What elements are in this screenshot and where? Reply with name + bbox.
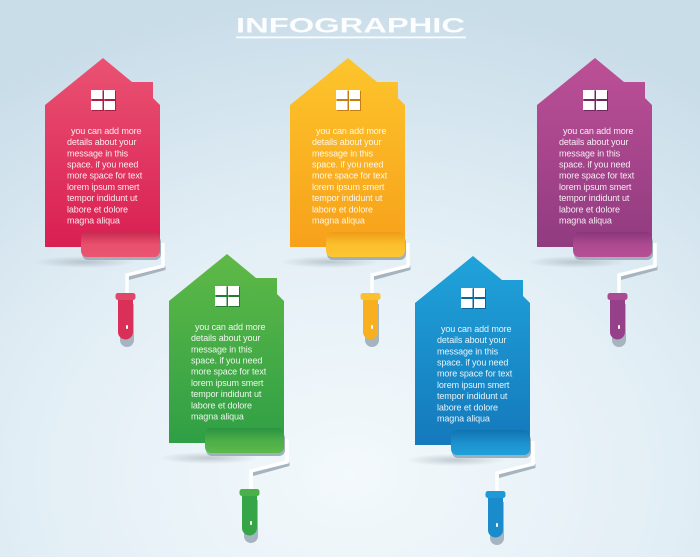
text: purple message: message in this <box>559 148 621 158</box>
text: green message: lorem ipsum smert <box>191 378 264 388</box>
text: yellow message: labore et dolore <box>312 204 373 214</box>
text: blue message: labore et dolore <box>437 402 498 412</box>
text: yellow message: you can add more <box>316 126 387 136</box>
text: green message: details about your <box>191 333 260 343</box>
roller: green <box>205 428 285 456</box>
text: purple message: space. if you need <box>559 160 630 170</box>
text: blue message: magna aliqua <box>437 414 490 424</box>
roller: purple <box>573 232 653 260</box>
text: yellow message: more space for text <box>312 171 388 181</box>
text: purple message: more space for text <box>559 171 635 181</box>
icon: yellow window <box>336 90 361 111</box>
text: green message: space. if you need <box>191 356 262 366</box>
text: blue message: message in this <box>437 346 499 356</box>
roller handle: yellow <box>360 243 410 347</box>
text: blue message: tempor indidunt ut <box>437 391 508 401</box>
roller handle: blue <box>486 441 536 545</box>
icon: red window <box>91 90 116 111</box>
text: red message: space. if you need <box>67 160 138 170</box>
text: red message: tempor indidunt ut <box>67 193 138 203</box>
text: yellow message: lorem ipsum smert <box>312 182 385 192</box>
text: yellow message: magna aliqua <box>312 216 365 226</box>
text: blue message: you can add more <box>441 324 512 334</box>
text: green message: you can add more <box>195 322 266 332</box>
text: green message: labore et dolore <box>191 400 252 410</box>
text: purple message: you can add more <box>563 126 634 136</box>
icon: purple window <box>583 90 608 111</box>
text: purple message: details about your <box>559 137 628 147</box>
house: yellow <box>290 58 405 247</box>
text: blue message: lorem ipsum smert <box>437 380 510 390</box>
roller handle: green <box>240 439 290 543</box>
panel: blue house roller <box>405 256 536 545</box>
roller: blue <box>451 430 531 458</box>
text: green message: tempor indidunt ut <box>191 389 262 399</box>
roller handle: red <box>116 243 166 347</box>
text: green message: message in this <box>191 344 253 354</box>
roller handle: purple <box>608 243 658 347</box>
roller: yellow <box>326 232 406 260</box>
text: purple message: magna aliqua <box>559 216 612 226</box>
house: red <box>45 58 160 247</box>
text: purple message: tempor indidunt ut <box>559 193 630 203</box>
text: red message: labore et dolore <box>67 204 128 214</box>
title: INFOGRAPHIC <box>236 14 465 38</box>
panel: yellow house roller <box>280 58 410 347</box>
house: green <box>169 254 284 443</box>
text: yellow message: tempor indidunt ut <box>312 193 383 203</box>
text: yellow message: details about your <box>312 137 381 147</box>
text: red message: details about your <box>67 137 136 147</box>
text: red message: magna aliqua <box>67 216 120 226</box>
text: green message: magna aliqua <box>191 412 244 422</box>
house: blue <box>415 256 530 445</box>
text: red message: you can add more <box>71 126 142 136</box>
text: red message: message in this <box>67 148 129 158</box>
text: red message: lorem ipsum smert <box>67 182 140 192</box>
text: yellow message: message in this <box>312 148 374 158</box>
panel: green house roller <box>159 254 290 543</box>
icon: green window <box>215 286 240 307</box>
text: yellow message: space. if you need <box>312 160 383 170</box>
text: red message: more space for text <box>67 171 143 181</box>
panel: red house roller <box>35 58 166 347</box>
text: purple message: labore et dolore <box>559 204 620 214</box>
text: blue message: more space for text <box>437 369 513 379</box>
roller: red <box>81 232 161 260</box>
panel: purple house roller <box>527 58 658 347</box>
text: blue message: details about your <box>437 335 506 345</box>
house: purple <box>537 58 652 247</box>
icon: blue window <box>461 288 486 309</box>
text: green message: more space for text <box>191 367 267 377</box>
text: purple message: lorem ipsum smert <box>559 182 632 192</box>
text: blue message: space. if you need <box>437 358 508 368</box>
